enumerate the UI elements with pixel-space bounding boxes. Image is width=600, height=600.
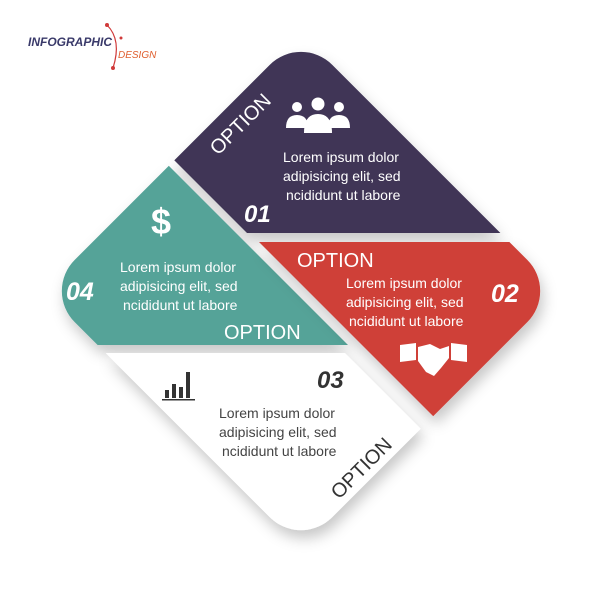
text block 03: adipisicing elit, sed [219,424,337,440]
logo: DESIGN [118,50,157,61]
text block 02: ncididunt ut labore [349,313,464,329]
number 01: 01 [244,201,271,228]
text: option 04: OPTION [224,322,301,344]
text block 01: adipisicing elit, sed [283,168,401,184]
text block 04: Lorem ipsum dolor [120,259,236,275]
panel: 03 white [106,353,426,544]
text: option 03: OPTION [327,434,397,504]
text block 03: ncididunt ut labore [222,443,337,459]
text block 03: Lorem ipsum dolor [219,405,335,421]
text block 04: adipisicing elit, sed [120,278,238,294]
number 03: 03 [317,367,344,394]
number 02: 02 [491,280,519,308]
icon: bar chart [162,372,195,400]
icon: handshake [400,343,467,376]
text block 02: Lorem ipsum dolor [346,275,462,291]
text: option 02: OPTION [297,250,374,272]
number 04: 04 [66,278,94,306]
icon: people [286,98,350,133]
panel: 01 purple [174,52,503,248]
text block 01: Lorem ipsum dolor [283,149,399,165]
panel: 04 teal [58,166,350,360]
logo [28,23,157,70]
text: option 01: OPTION [206,90,276,160]
text block 02: adipisicing elit, sed [346,294,464,310]
text block 01: ncididunt ut labore [286,187,401,203]
logo: INFOGRAPHIC [28,35,112,49]
panel: 02 red [259,242,550,427]
text block 04: ncididunt ut labore [123,297,238,313]
icon: dollar: $ [151,201,171,242]
